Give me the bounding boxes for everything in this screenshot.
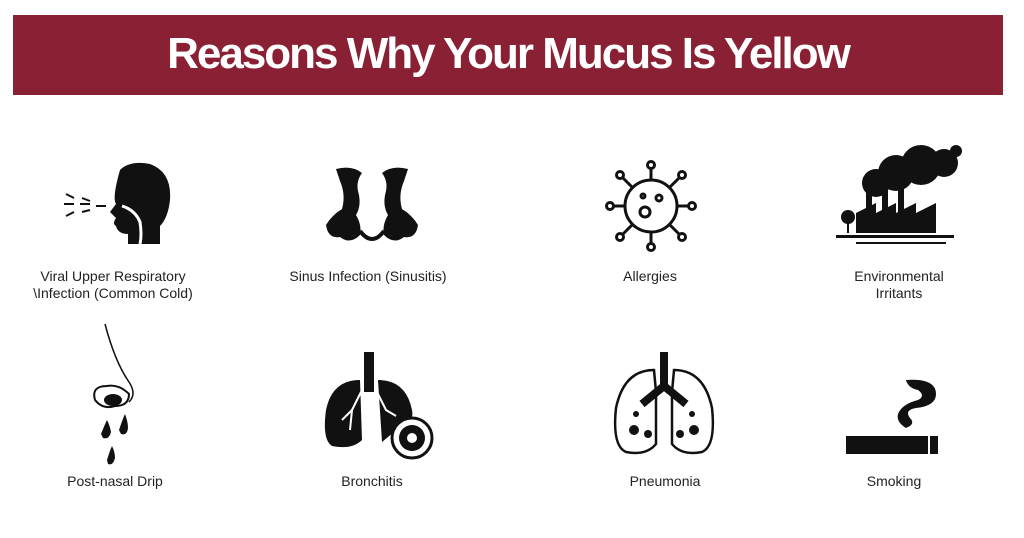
label: viral: \Infection (Common Cold) xyxy=(33,285,193,301)
icon: factory pollution xyxy=(836,145,962,244)
label: pneumonia: Pneumonia xyxy=(630,473,700,489)
icon: pneumonia lungs xyxy=(614,352,714,454)
label: post-nasal: Post-nasal Drip xyxy=(67,473,163,489)
label: bronchitis: Bronchitis xyxy=(341,473,403,489)
icon: head sneezing xyxy=(64,162,170,244)
label: sinus: Sinus Infection (Sinusitis) xyxy=(289,268,447,284)
label: environmental xyxy=(854,268,944,301)
icon: sinus xyxy=(326,168,418,241)
title banner xyxy=(13,15,1003,95)
icon: nose drip xyxy=(93,324,134,464)
label: environmental: Irritants xyxy=(876,285,922,301)
label: viral xyxy=(33,268,193,301)
title: Reasons Why Your Mucus Is Yellow xyxy=(167,29,849,78)
label: environmental: Environmental xyxy=(854,268,944,284)
label: viral: Viral Upper Respiratory xyxy=(40,268,186,284)
icon: bronchitis lungs xyxy=(324,352,434,460)
icon: cigarette smoke xyxy=(846,380,938,454)
label: allergies: Allergies xyxy=(623,268,677,284)
icon: allergen virus xyxy=(605,160,697,252)
label: smoking: Smoking xyxy=(867,473,921,489)
